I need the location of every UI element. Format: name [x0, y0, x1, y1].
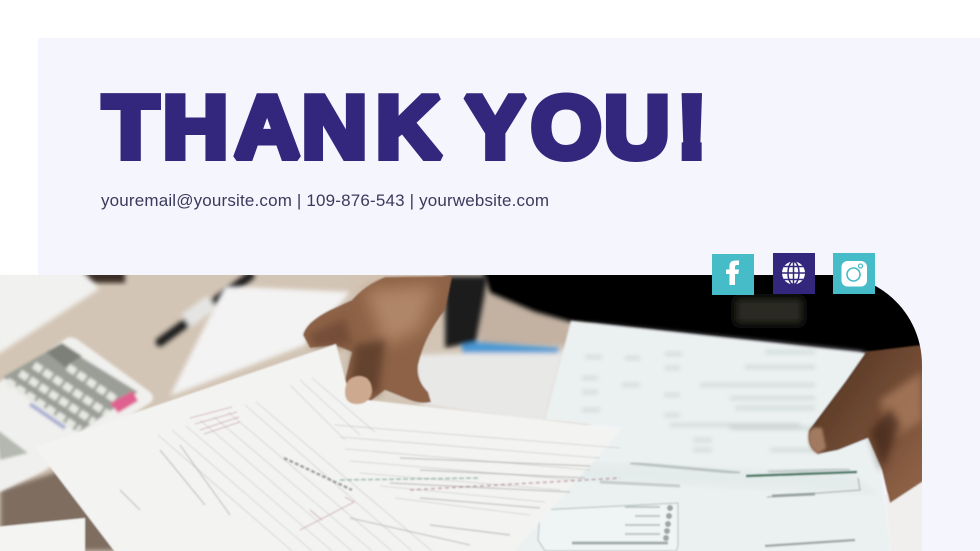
- sheet: front form: [35, 344, 622, 551]
- hand: right: [808, 345, 925, 503]
- hand: left: [303, 276, 452, 404]
- form: address band: [284, 458, 352, 490]
- table surface: [0, 270, 590, 551]
- form: pink grid: [190, 407, 354, 530]
- sheet: bottom left: [0, 518, 85, 551]
- contact details: youremail@yoursite.com | 109-876-543 | yourwebsite.com: [101, 191, 549, 210]
- pen: [160, 276, 250, 342]
- table: lower right: [886, 481, 922, 551]
- blurred shape in dark background: [735, 298, 803, 324]
- title: THANK YOU!: [103, 78, 707, 176]
- sheet: top left: [0, 270, 99, 356]
- blurred object at top left: [82, 275, 129, 286]
- dark background: [480, 275, 920, 355]
- form lines: [158, 378, 620, 551]
- icon: facebook: [712, 254, 754, 295]
- sheet: middle: [415, 276, 565, 425]
- icon: globe: [773, 253, 815, 294]
- sheet: behind hand: [170, 286, 350, 396]
- icon: instagram: [833, 253, 875, 294]
- photo: hands holding paperwork: [0, 270, 930, 551]
- fingertip over the form: [345, 376, 372, 404]
- sheet: right document: [505, 321, 892, 551]
- calculator: [0, 337, 153, 494]
